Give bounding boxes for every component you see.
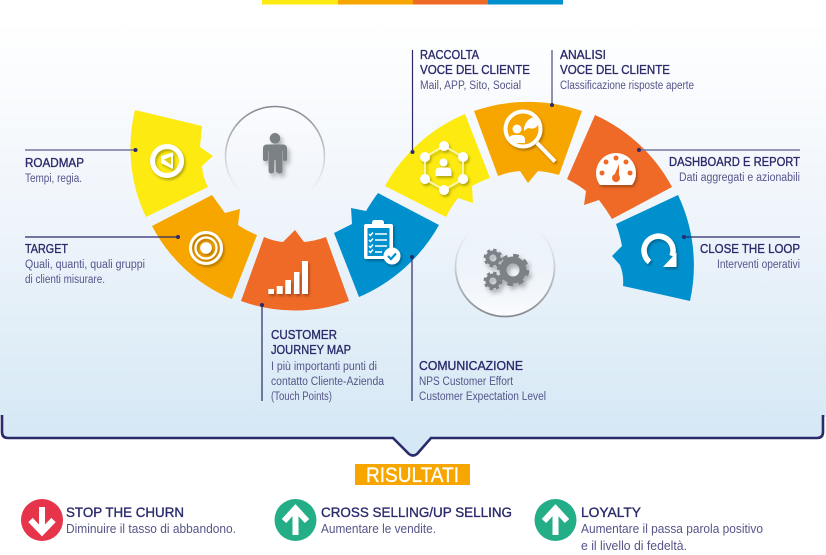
callout: raccolta voce del cliente <box>410 47 530 154</box>
result: loyalty: Aumentare il passa parola positivo <box>581 522 763 536</box>
icon: gears <box>485 250 527 289</box>
callout: roadmap: Tempi, regia. <box>25 173 82 185</box>
callout: dashboard e report <box>637 148 800 184</box>
callout: close the loop: CLOSE THE LOOP <box>700 241 800 256</box>
callout: dashboard e report: DASHBOARD E REPORT <box>669 154 800 169</box>
callout: comunicazione: NPS Customer Effort <box>419 376 514 388</box>
callout: target: Quali, quanti, quali gruppi <box>25 259 145 271</box>
callout: analisi voce del cliente: VOCE DEL CLIENTE <box>560 62 670 77</box>
callout: analisi voce del cliente: Classificazione risposte aperte <box>560 80 694 92</box>
callout: customer journey map: I più importanti punti di <box>271 361 377 373</box>
callout: target: TARGET <box>25 241 68 256</box>
callout: analisi voce del cliente: ANALISI <box>560 47 606 62</box>
callout: roadmap: ROADMAP <box>25 155 84 170</box>
result: stop the churn <box>21 499 236 541</box>
icon: gauge <box>596 153 636 185</box>
callout: comunicazione: COMUNICAZIONE <box>419 358 523 373</box>
result: cross selling <box>274 499 512 541</box>
segment: comunicazione (blue) <box>334 193 439 297</box>
bracket with pointer <box>2 415 823 456</box>
icon: bar chart <box>268 261 308 294</box>
segment: target (orange) <box>152 195 257 299</box>
callout: target <box>25 235 180 286</box>
segment: roadmap (yellow) <box>130 110 213 217</box>
icon: person <box>263 133 287 174</box>
callout: dashboard e report: Dati aggregati e azionabili <box>679 172 800 184</box>
callout: target: di clienti misurare. <box>25 274 105 286</box>
callout: comunicazione: Customer Expectation Level <box>419 391 546 403</box>
icon: network <box>420 141 468 195</box>
result: loyalty: LOYALTY <box>581 504 642 520</box>
gears circle <box>456 218 554 316</box>
callout: customer journey map: JOURNEY MAP <box>271 342 351 357</box>
callout: customer journey map: CUSTOMER <box>271 327 337 342</box>
callout: customer journey map: contatto Cliente-Azienda <box>271 376 385 388</box>
result: loyalty <box>534 499 763 553</box>
callout: roadmap <box>25 148 138 185</box>
top colour bar <box>262 0 563 4</box>
callout: comunicazione <box>410 255 546 403</box>
callout: close the loop: Interventi operativi <box>717 259 800 271</box>
result: stop the churn: Diminuire il tasso di abbandono. <box>66 522 236 536</box>
background panel <box>0 20 826 456</box>
result: loyalty: e il livello di fedeltà. <box>581 539 687 553</box>
person circle <box>226 106 324 206</box>
result: stop the churn: STOP THE CHURN <box>66 504 184 520</box>
result: cross selling: Aumentare le vendite. <box>321 522 436 536</box>
callout: customer journey map <box>260 303 385 403</box>
icon: magnifier <box>506 112 555 162</box>
callout: raccolta voce del cliente: RACCOLTA <box>420 47 479 62</box>
segment: customer journey map (red-orange) <box>241 230 349 311</box>
callout: customer journey map: (Touch Points) <box>271 391 332 403</box>
callout: raccolta voce del cliente: VOCE DEL CLIENTE <box>420 62 530 77</box>
icon: loop arrow <box>644 236 676 267</box>
icon: clipboard <box>364 220 400 264</box>
segment: analisi voce del cliente (orange) <box>474 102 582 183</box>
callout: analisi voce del cliente <box>550 47 694 107</box>
callout: raccolta voce del cliente: Mail, APP, Sito, Social <box>420 80 521 92</box>
icon: compass <box>152 146 182 176</box>
segment: close the loop (blue) <box>612 195 694 301</box>
icon: target <box>190 232 222 264</box>
callout: close the loop <box>682 235 800 271</box>
heading: risultati: RISULTATI <box>366 464 459 487</box>
segment: raccolta voce del cliente (yellow) <box>385 114 490 217</box>
result: cross selling: CROSS SELLING/UP SELLING <box>321 504 512 520</box>
segment: dashboard e report (red-orange) <box>567 115 672 219</box>
